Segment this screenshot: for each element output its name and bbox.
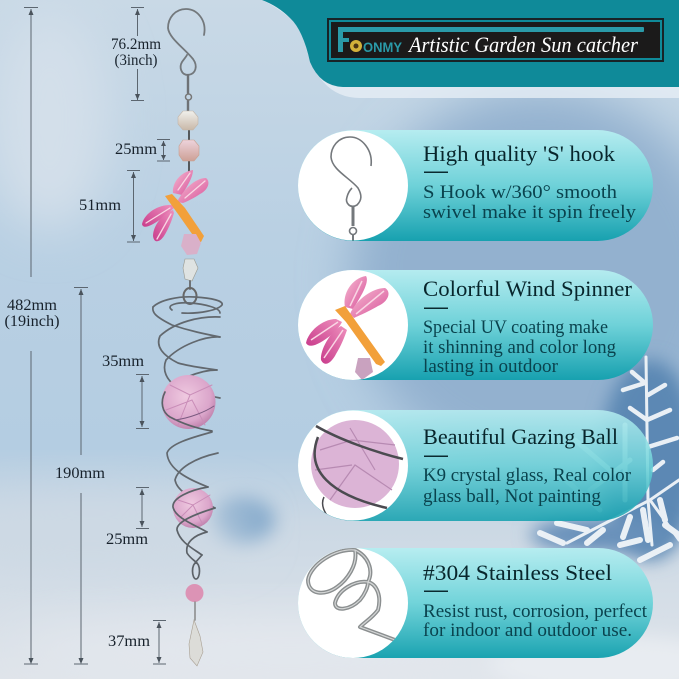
header band [262, 0, 679, 98]
dimension: 25mm crystal: 25mm [115, 141, 157, 158]
dimension: 25mm crystal [115, 140, 170, 161]
dimension: 37mm: 37mm [108, 633, 150, 650]
feature: stainless steel [298, 548, 653, 658]
dimension: 35mm [102, 353, 149, 428]
description: K9 crystal glass, Real color [423, 466, 631, 486]
dimension: 482mm [4, 8, 60, 664]
dimension: 35mm: 35mm [102, 353, 144, 370]
description: it shinning and color long [423, 338, 616, 358]
dimension: 76.2mm [111, 8, 161, 100]
s hook [168, 9, 205, 75]
icon: crystal ball [311, 420, 403, 520]
logo banner: Artistic Garden Sun catcher [407, 32, 638, 57]
heading: Beautiful Gazing Ball [423, 424, 618, 449]
description: Resist rust, corrosion, perfect [423, 602, 648, 622]
dimension: 190mm [55, 288, 105, 664]
description: S Hook w/360° smooth [423, 183, 617, 203]
spiral back strands [153, 297, 222, 508]
dimension: 76.2mm: (3inch) [114, 52, 158, 69]
chain and crystals [178, 75, 199, 172]
logo banner: ONMY [363, 39, 403, 55]
description: for indoor and outdoor use. [423, 621, 632, 641]
dragonfly [142, 170, 208, 255]
snowflake [540, 357, 679, 560]
heading: Colorful Wind Spinner [423, 276, 633, 301]
small crystal ball [173, 488, 213, 528]
description: lasting in outdoor [423, 357, 558, 377]
heading: High quality 'S' hook [423, 141, 616, 166]
feature: gazing ball [298, 410, 653, 521]
dimension: 51mm: 51mm [79, 197, 121, 214]
dimension: 482mm: (19inch) [4, 313, 60, 330]
lower crystal and ring [183, 259, 198, 304]
dimension annotations [4, 8, 170, 664]
heading: #304 Stainless Steel [423, 560, 612, 585]
bottom bead and drop [186, 584, 204, 666]
spiral front strands [162, 392, 215, 579]
description: swivel make it spin freely [423, 203, 637, 223]
dimension: 482mm: 482mm [7, 297, 57, 314]
dimension: 190mm: 190mm [55, 465, 105, 482]
dimension: 25mm ball: 25mm [106, 531, 148, 548]
icon: dragonfly [306, 276, 389, 380]
dimension: 25mm ball [106, 488, 149, 548]
icon: S hook [331, 137, 371, 241]
feature: wind spinner colour [298, 270, 653, 380]
feature: S hook [298, 130, 653, 241]
description: glass ball, Not painting [423, 487, 601, 507]
dimension: 37mm [108, 620, 166, 664]
icon: steel coil [308, 550, 395, 640]
dimension: 76.2mm: 76.2mm [111, 36, 161, 53]
large crystal ball [162, 375, 216, 429]
description: Special UV coating make [423, 318, 608, 338]
logo banner [327, 18, 664, 62]
dimension: 51mm [79, 170, 140, 242]
product: wind spinner [142, 9, 222, 666]
